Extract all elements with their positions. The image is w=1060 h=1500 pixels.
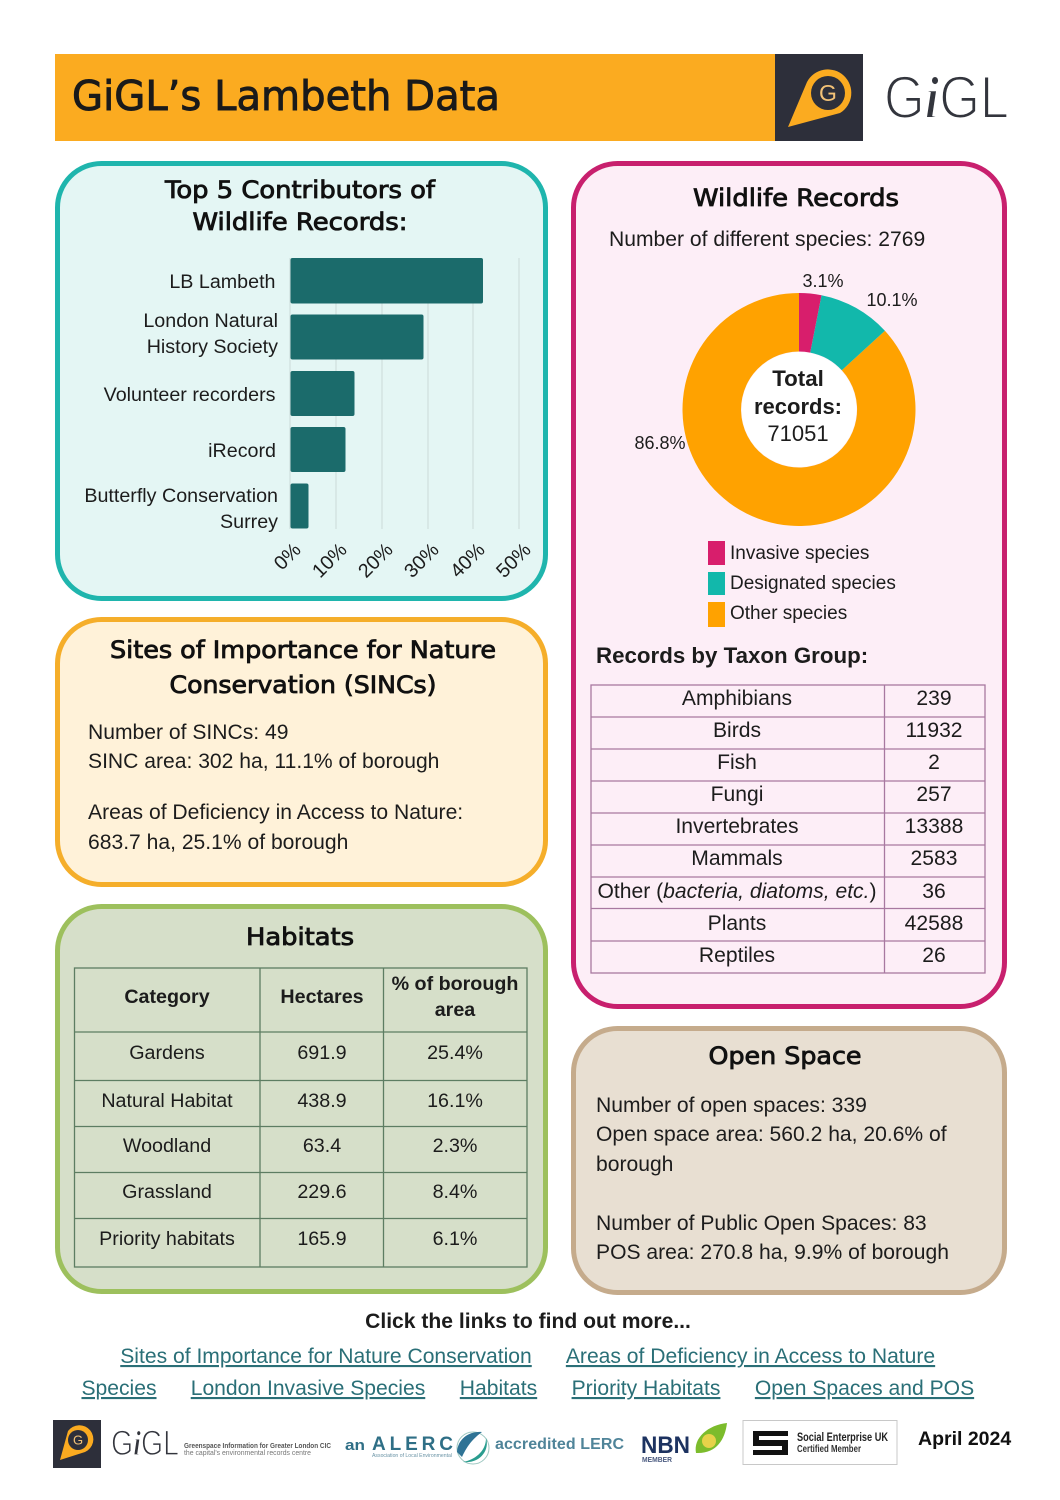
table: taxon groups: 257 — [916, 783, 952, 806]
table: habitats: 438.9 — [297, 1090, 347, 1112]
date: April 2024 — [918, 1428, 1011, 1450]
text: open space statistics — [596, 1094, 949, 1264]
text: SINC statistics: Number of SINCs: 49 — [88, 721, 288, 744]
table: taxon groups: 42588 — [905, 912, 963, 935]
GiGL tagline: Greenspace Information for Greater London CIC — [184, 1443, 331, 1450]
NBN member logo: MEMBER — [642, 1457, 672, 1464]
donut chart: records by species type: 71051 — [767, 421, 829, 446]
links section: Open Spaces and POS — [755, 1377, 974, 1400]
links section: Species — [81, 1377, 157, 1400]
text: SINC statistics — [88, 721, 463, 854]
table: taxon groups: Fish — [717, 751, 757, 774]
table: habitats: 691.9 — [297, 1042, 347, 1064]
heading: contributors — [164, 176, 436, 236]
GiGL wordmark: GiGL — [884, 64, 1009, 131]
small GiGL wordmark: GiGL — [111, 1424, 179, 1463]
Social Enterprise UK badge — [743, 1420, 897, 1464]
table: habitats: 8.4% — [433, 1181, 477, 1203]
links section: Habitats — [460, 1377, 537, 1400]
table: habitats: 16.1% — [427, 1090, 483, 1112]
bar chart: contributors: 10% — [308, 539, 352, 582]
table: taxon groups: Plants — [708, 912, 766, 935]
Social Enterprise UK badge: Social Enterprise UK — [797, 1430, 888, 1444]
table: taxon groups: Birds — [713, 719, 761, 742]
table: habitats: % of borough — [392, 973, 518, 995]
donut chart: records by species type — [634, 271, 918, 526]
table: habitats: 229.6 — [297, 1181, 347, 1203]
bar chart: contributors: 0% — [270, 539, 306, 575]
table: habitats: 6.1% — [433, 1228, 477, 1250]
panel: SINCs — [58, 620, 546, 884]
bar chart: contributors: 30% — [400, 539, 444, 582]
table: habitats: Gardens — [129, 1042, 205, 1064]
icon: GiGL pin logo: G — [819, 80, 837, 106]
GiGL tagline: the capital's environmental records centre — [184, 1450, 311, 1457]
GiGL tagline — [184, 1443, 331, 1457]
bar chart: contributors: Surrey — [220, 511, 278, 533]
heading: SINCs: Sites of Importance for Nature — [110, 636, 496, 664]
table: taxon groups: Invertebrates — [675, 815, 799, 838]
ALERC logo — [345, 1432, 624, 1464]
panel: habitats — [58, 906, 546, 1292]
table: taxon groups: 2583 — [911, 847, 957, 870]
heading: SINCs: Conservation (SINCs) — [170, 671, 436, 699]
NBN member logo — [641, 1423, 727, 1464]
table: habitats: Woodland — [123, 1135, 211, 1157]
text: open space statistics: POS area: 270.8 ha, 9.9% of borough — [596, 1241, 949, 1264]
table: taxon groups: Amphibians — [682, 687, 792, 710]
table: habitats: 2.3% — [433, 1135, 477, 1157]
heading: contributors: Top 5 Contributors of — [164, 176, 436, 204]
links section: London Invasive Species — [191, 1377, 425, 1400]
heading: habitats: Habitats — [246, 923, 354, 951]
heading: contributors: Wildlife Records: — [192, 208, 408, 236]
bar chart: contributors: 20% — [354, 539, 398, 582]
icon: GiGL pin logo — [775, 54, 863, 141]
table: habitats: 165.9 — [297, 1228, 347, 1250]
text: SINC statistics: SINC area: 302 ha, 11.1% of borough — [88, 750, 439, 773]
bar chart: contributors: 40% — [446, 539, 490, 582]
table: habitats: 25.4% — [427, 1042, 483, 1064]
table: taxon groups: 26 — [922, 944, 946, 967]
donut chart: records by species type: records: — [754, 394, 842, 419]
panel: top 5 contributors — [58, 164, 546, 598]
table: taxon groups: Other (bacteria, diatoms, etc.) — [597, 880, 877, 903]
footer logos — [53, 1420, 1011, 1468]
panel: open space — [574, 1028, 1004, 1292]
table: taxon groups — [591, 685, 985, 973]
Social Enterprise UK badge: Certified Member — [797, 1444, 861, 1455]
table: habitats: Grassland — [122, 1181, 212, 1203]
donut chart: records by species type: Total — [772, 366, 824, 391]
table: taxon groups: 11932 — [905, 719, 963, 742]
table: habitats: Hectares — [280, 986, 364, 1008]
bar chart: contributors: LB Lambeth — [169, 271, 276, 293]
bar chart: contributors: Butterfly Conservation — [84, 485, 278, 507]
bar chart: contributors: London Natural — [143, 310, 278, 332]
table: taxon groups: Mammals — [691, 847, 783, 870]
legend: species types: Designated species — [730, 573, 896, 594]
links section: Areas of Deficiency in Access to Nature — [566, 1345, 935, 1368]
links section: Click the links to find out more... — [365, 1310, 691, 1333]
legend: species types — [708, 541, 896, 627]
table: taxon groups: 239 — [916, 687, 952, 710]
bar chart: contributors: iRecord — [208, 440, 276, 462]
bar chart: contributors — [84, 258, 536, 582]
table: habitats: Priority habitats — [99, 1228, 235, 1250]
donut chart: records by species type: 10.1% — [866, 290, 918, 310]
legend: species types: Invasive species — [730, 543, 869, 564]
text: open space statistics: borough — [596, 1153, 673, 1176]
heading: records by taxon group: Records by Taxon Group: — [596, 643, 868, 668]
table: habitats: 63.4 — [303, 1135, 341, 1157]
bar chart: contributors: 50% — [492, 539, 536, 582]
table: habitats: area — [435, 999, 476, 1021]
links section: Priority Habitats — [572, 1377, 720, 1400]
links section — [81, 1310, 974, 1400]
text: open space statistics: Number of Public Open Spaces: 83 — [596, 1212, 927, 1235]
table: taxon groups: 36 — [922, 880, 946, 903]
text: open space statistics: Open space area: 560.2 ha, 20.6% of — [596, 1123, 947, 1146]
header banner — [55, 54, 775, 141]
text: open space statistics: Number of open spaces: 339 — [596, 1094, 867, 1117]
heading: wildlife records: Wildlife Records — [693, 184, 899, 212]
icon: small GiGL pin logo — [53, 1420, 101, 1468]
donut chart: records by species type: 86.8% — [634, 433, 686, 453]
panel: wildlife records — [574, 164, 1004, 1006]
table: taxon groups: 2 — [928, 751, 940, 774]
ALERC logo: an — [345, 1437, 365, 1454]
bar chart: contributors: History Society — [147, 336, 278, 358]
heading: SINCs — [110, 636, 496, 699]
table: habitats — [74, 968, 527, 1267]
ALERC logo: ALERC — [372, 1434, 453, 1455]
table: taxon groups: Reptiles — [699, 944, 775, 967]
text: SINC statistics: 683.7 ha, 25.1% of borough — [88, 831, 348, 854]
icon: small GiGL pin logo: G — [73, 1432, 83, 1448]
bar chart: contributors: Volunteer recorders — [104, 384, 276, 406]
table: taxon groups: Fungi — [711, 783, 763, 806]
text: SINC statistics: Areas of Deficiency in Access to Nature: — [88, 801, 463, 824]
heading: open space: Open Space — [708, 1042, 862, 1070]
links section: Sites of Importance for Nature Conservation — [120, 1345, 532, 1368]
table: habitats: Natural Habitat — [101, 1090, 233, 1112]
table: habitats: Category — [124, 986, 210, 1008]
title: GiGL’s Lambeth Data — [72, 72, 500, 120]
legend: species types: Other species — [730, 603, 847, 624]
table: taxon groups: 13388 — [905, 815, 963, 838]
text: number of species: Number of different species: 2769 — [609, 228, 925, 251]
NBN member logo: NBN — [641, 1432, 690, 1459]
donut chart: records by species type: 3.1% — [802, 271, 844, 291]
ALERC logo: accredited LERC — [495, 1436, 624, 1453]
ALERC logo: Association of Local Environmental — [372, 1453, 452, 1459]
